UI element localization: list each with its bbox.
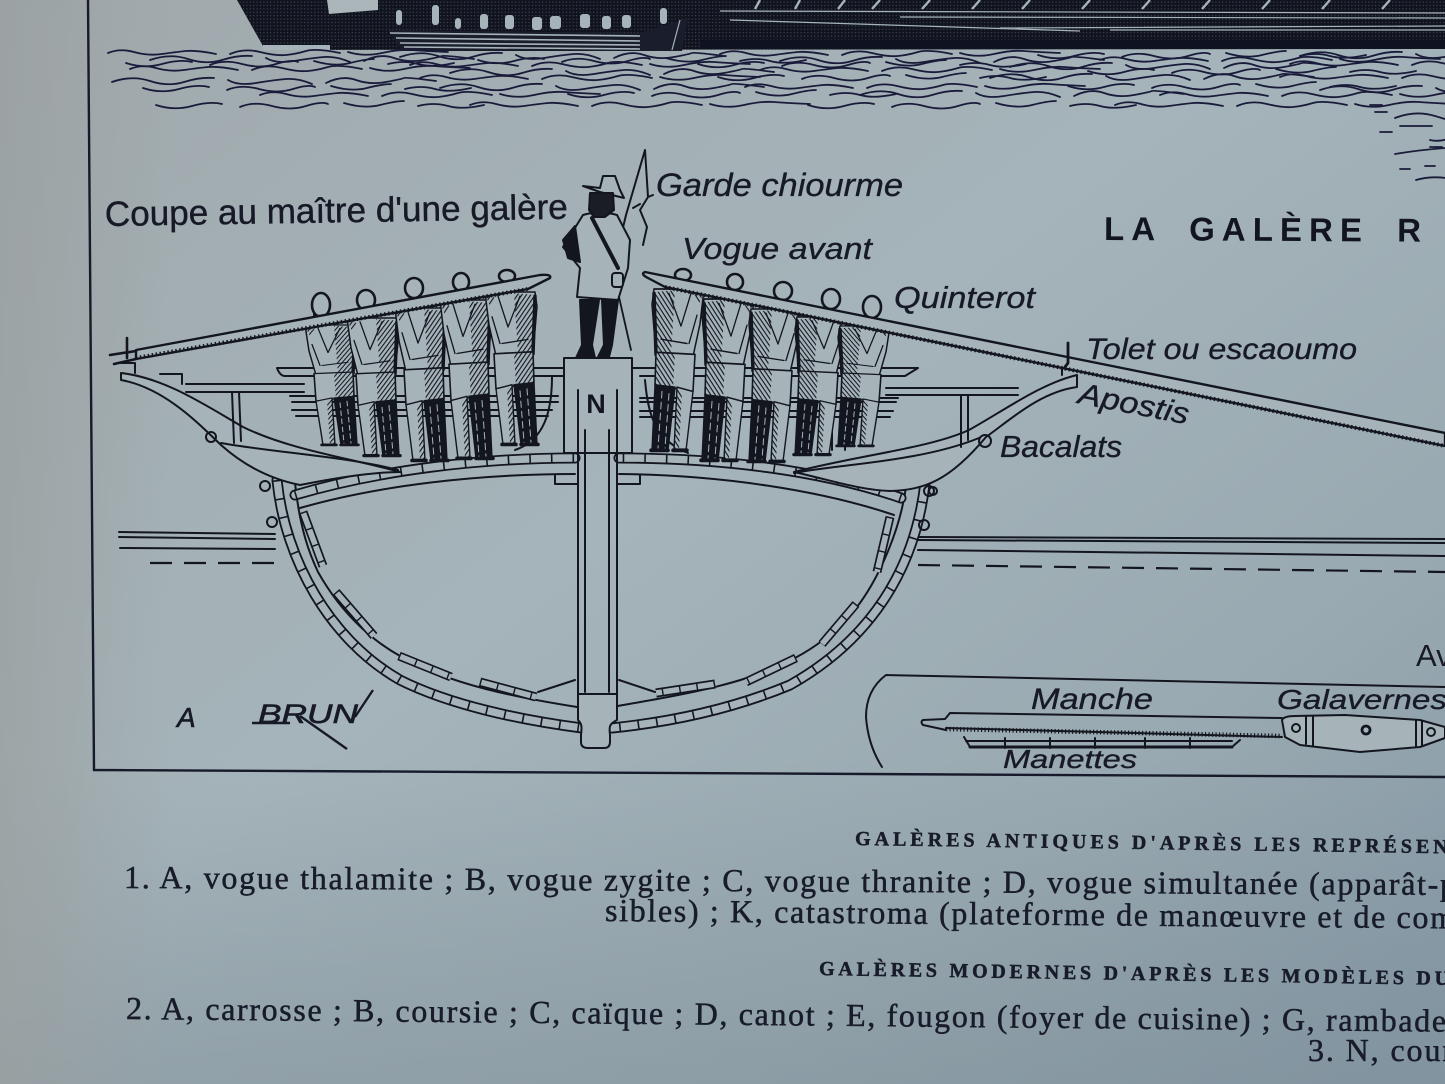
right rowers xyxy=(651,269,890,461)
label: Tolet ou escaoumo: Tolet ou escaoumo xyxy=(1086,333,1357,366)
galley hull at top xyxy=(237,0,1445,51)
label: Manettes: Manettes xyxy=(1003,744,1137,774)
right oar xyxy=(643,272,1445,446)
italic callout labels xyxy=(656,167,1445,774)
label: Apostis: Apostis xyxy=(1073,377,1192,431)
plate frame xyxy=(88,0,1445,777)
floors near keel xyxy=(538,680,655,692)
caption line 3: 2. A, carrosse ; B, coursie ; C, caïque ; D, canot ; E, fougon (foyer de cuisine) ; G, rambade xyxy=(126,990,1445,1039)
galley cross-section xyxy=(110,150,1445,767)
oar blade detail xyxy=(866,675,1445,767)
central post and keel xyxy=(564,358,632,748)
right apostis wing xyxy=(794,364,1077,530)
left rowers xyxy=(305,270,538,460)
label: Garde chiourme: Garde chiourme xyxy=(656,167,903,203)
label: Quinterot: Quinterot xyxy=(894,280,1037,315)
caption line 2: sibles) ; K, catastroma (plateforme de manœuvre et de com xyxy=(605,892,1445,935)
left oar xyxy=(110,275,550,364)
label: Galavernes: Galavernes xyxy=(1277,684,1445,715)
small boat xyxy=(388,18,688,51)
inner ribs xyxy=(303,512,890,697)
label: Bacalats: Bacalats xyxy=(1000,429,1122,464)
caption text xyxy=(124,827,1445,1068)
deck beams xyxy=(295,458,901,515)
caption line 1: 1. A, vogue thalamite ; B, vogue zygite ; C, vogue thranite ; D, vogue simultanée (apparât-p xyxy=(124,859,1445,902)
section title: LA GALÈRE R xyxy=(1104,210,1425,249)
label: Vogue avant: Vogue avant xyxy=(682,231,874,266)
sea waves xyxy=(108,50,1445,180)
water lines xyxy=(119,532,1445,572)
label: Manche: Manche xyxy=(1031,683,1153,716)
heading: galeres modernes: GALÈRES MODERNES D'APRÈS LES MODÈLES DU xyxy=(819,957,1445,990)
engraver signature: BRUN xyxy=(258,699,359,729)
crew on deck xyxy=(396,5,667,30)
left apostis wing xyxy=(121,363,400,527)
engraver signature: A xyxy=(175,702,196,733)
post letter N: N xyxy=(586,389,606,419)
hull outer planking xyxy=(277,480,925,728)
engraver signature xyxy=(175,690,373,749)
benches xyxy=(277,368,918,453)
guard figure xyxy=(563,150,653,358)
label: Coupe au maitre: Coupe au maître d'une galère xyxy=(105,188,568,234)
